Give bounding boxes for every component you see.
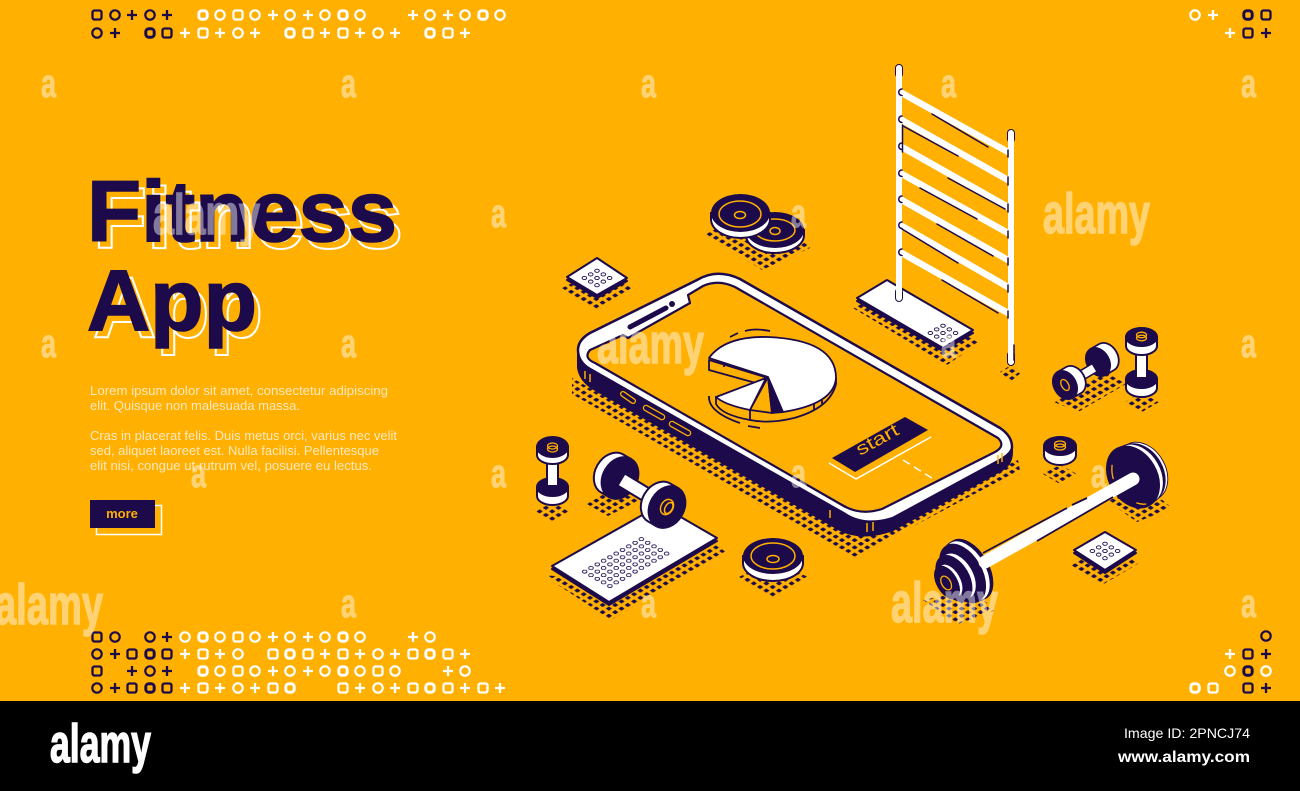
watermarks: a [791, 192, 807, 236]
watermarks: a [41, 62, 57, 106]
watermarks: alamy [891, 571, 998, 635]
title [87, 164, 403, 356]
description text: Cras in placerat felis. Duis metus orci, varius nec velit [90, 428, 397, 443]
top symbol strip [92, 10, 505, 38]
bottom black bar [0, 701, 1300, 791]
watermarks: a [641, 582, 657, 626]
phone screen [587, 283, 1001, 512]
description text: elit nisi, congue ut rutrum vel, posuere eu lectus. [90, 458, 372, 473]
watermarks: a [491, 192, 507, 236]
lying dumbbell [586, 446, 693, 535]
phone bezel [578, 274, 1012, 522]
more button: more [106, 506, 138, 521]
watermarks: a [941, 322, 957, 366]
watermarks: a [641, 62, 657, 106]
title: App [87, 253, 257, 349]
title: App [93, 260, 263, 356]
side buttons [585, 371, 1002, 532]
watermarks: a [41, 322, 57, 366]
watermarks: alamy [153, 183, 260, 247]
watermarks: a [1241, 582, 1257, 626]
barbell [922, 431, 1179, 616]
smartphone [578, 274, 1012, 536]
vertical dumbbell left [537, 437, 568, 505]
ladder base [857, 280, 973, 351]
title: Fitness [93, 171, 403, 267]
watermarks: a [341, 582, 357, 626]
left weight [922, 531, 1002, 616]
more button [90, 500, 162, 534]
halftone shadows [535, 225, 1172, 624]
watermarks: a [341, 322, 357, 366]
phone side [578, 350, 1012, 536]
right weight [1096, 431, 1179, 518]
watermarks: a [941, 62, 957, 106]
small exercise pad [567, 258, 627, 298]
watermarks: a [1091, 452, 1107, 496]
watermarks [0, 62, 1257, 637]
small lying dumbbell [1048, 339, 1124, 403]
watermarks: alamy [1043, 182, 1150, 246]
watermarks: alamy [597, 312, 704, 376]
wall ladder [899, 68, 1014, 362]
bottom symbol strip [92, 632, 505, 693]
watermarks: a [491, 452, 507, 496]
watermarks: a [191, 452, 207, 496]
start button: start [852, 420, 902, 459]
weight plates top [711, 194, 804, 253]
top right symbol strip [1190, 10, 1271, 38]
watermarks: a [1241, 322, 1257, 366]
pie chart [709, 330, 836, 428]
title: Fitness [87, 164, 397, 260]
small pad right [1074, 532, 1136, 573]
weight plate bottom [743, 538, 803, 581]
bottom right symbol strip [1191, 631, 1271, 693]
small disc [1044, 437, 1076, 465]
small vertical dumbbell [1126, 328, 1157, 397]
image id: Image ID: 2PNCJ74 [1124, 725, 1250, 741]
description text: elit. Quisque non malesuada massa. [90, 398, 300, 413]
watermarks: a [791, 452, 807, 496]
description text: sed, aliquet laoreet est. Nulla facilisi. Pellentesque [90, 443, 379, 458]
speaker and camera [630, 301, 675, 327]
website: www.alamy.com [1117, 749, 1250, 766]
bar [985, 479, 1133, 562]
alamy logo: alamy [50, 714, 151, 774]
watermarks: a [1241, 62, 1257, 106]
description text [90, 383, 397, 473]
watermarks: a [341, 62, 357, 106]
exercise mat [552, 505, 717, 605]
start button [829, 417, 935, 480]
description text: Lorem ipsum dolor sit amet, consectetur adipiscing [90, 383, 388, 398]
